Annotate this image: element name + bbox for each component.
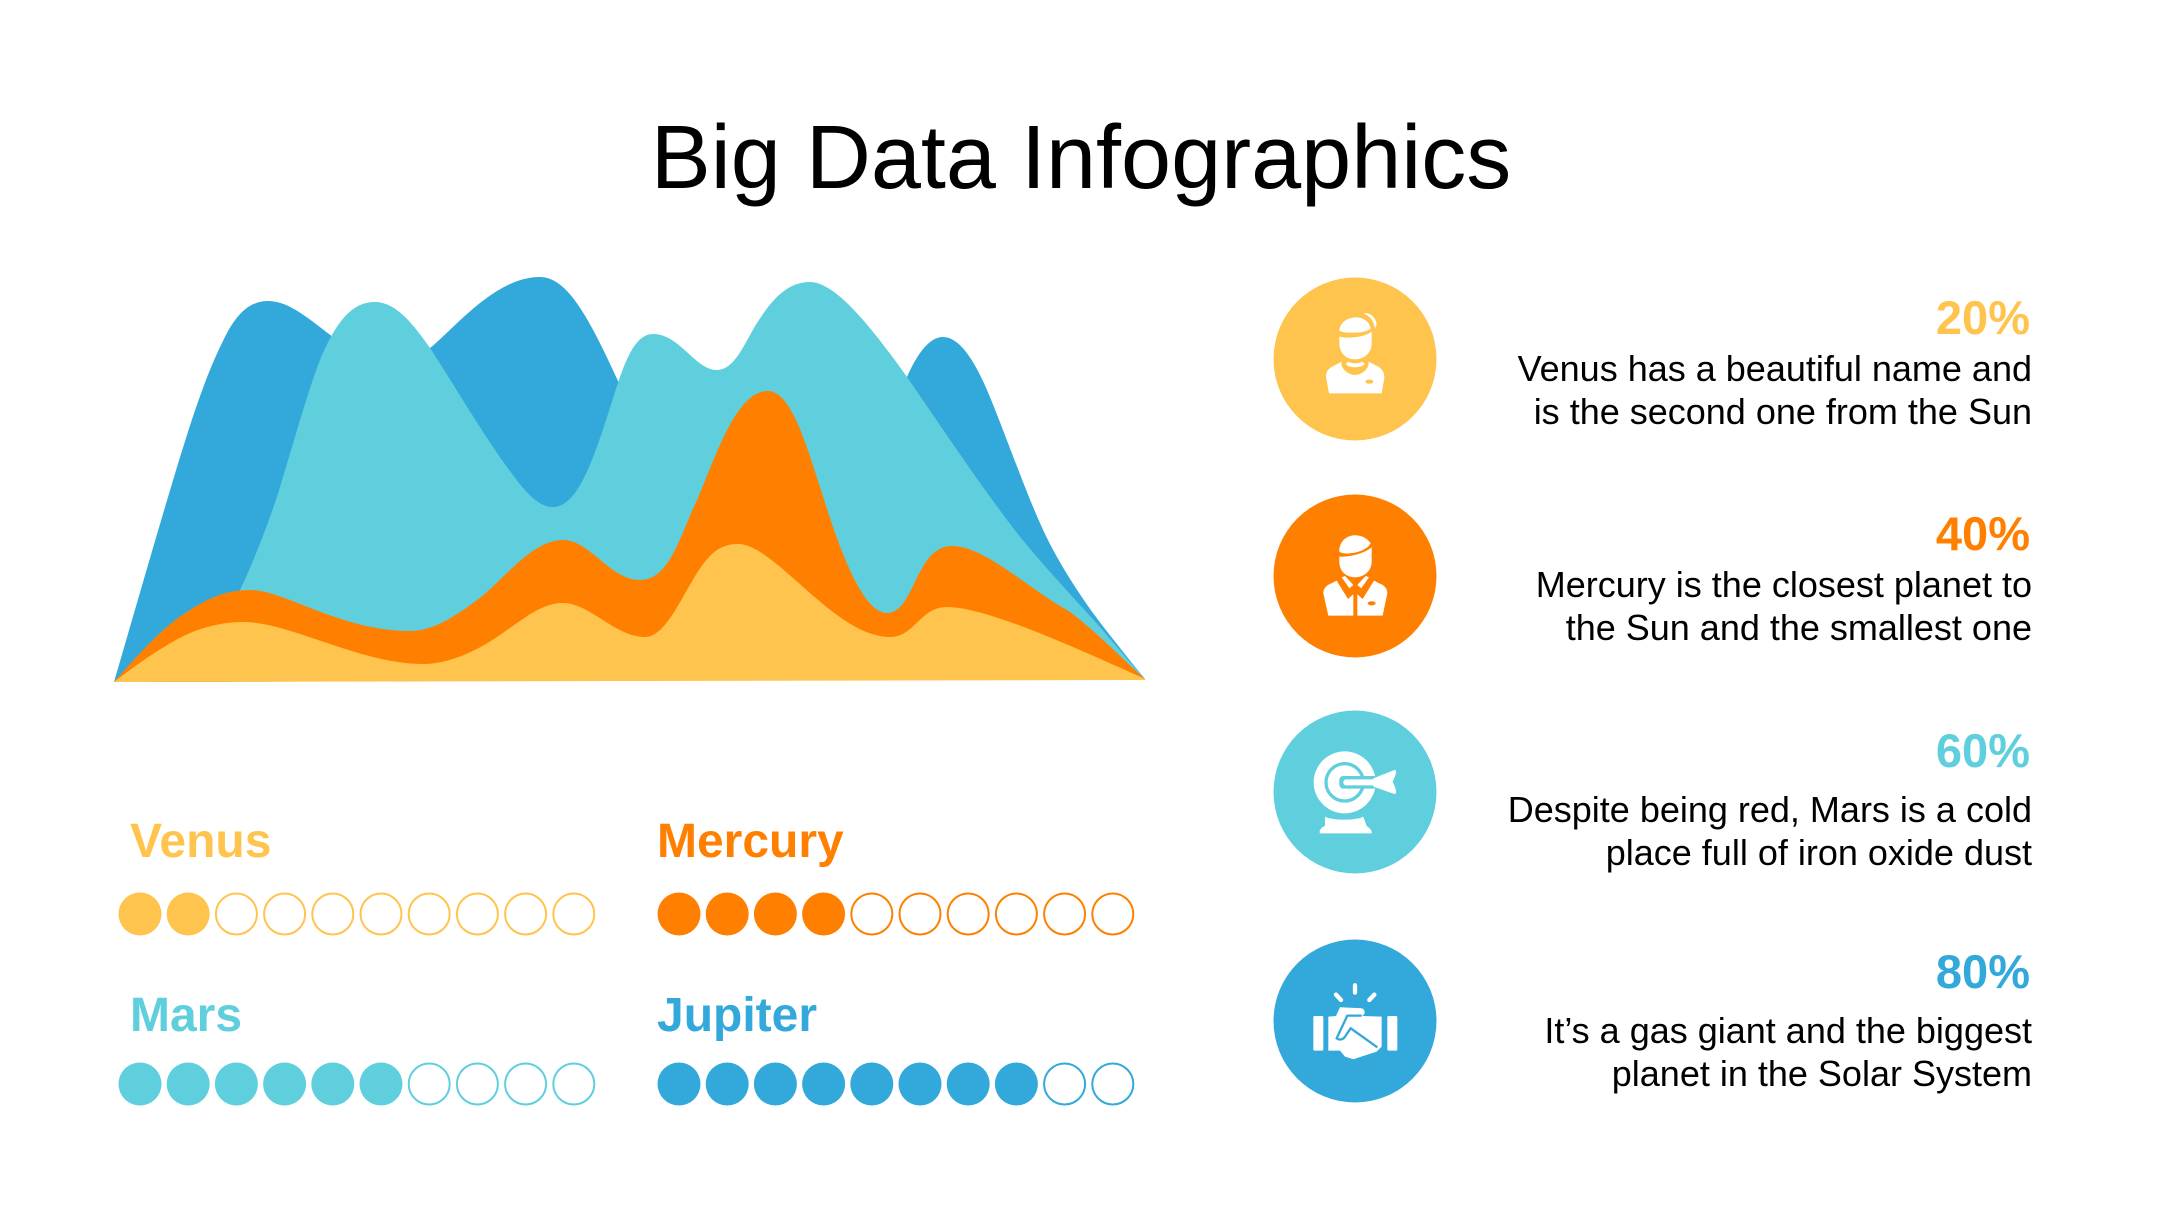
legend: Mars: Mars — [130, 989, 242, 1042]
legend: Jupiter — [657, 989, 1133, 1106]
stat: Jupiter 80%: 80% — [1936, 945, 2030, 998]
legend: Jupiter: Jupiter — [657, 989, 817, 1042]
stat: Venus 20%: 20% — [1936, 291, 2030, 344]
stat: Mars 60% — [1508, 724, 2032, 873]
legend: Mercury — [657, 815, 1133, 936]
legend: Mars — [118, 989, 594, 1106]
stat: Mars 60%: 60% — [1936, 724, 2030, 777]
stat: Mercury 40%: Mercury is the closest planet to — [1536, 564, 2032, 605]
stat: Venus 20% — [1518, 291, 2032, 432]
stat: Jupiter 80%: planet in the Solar System — [1612, 1053, 2032, 1094]
stat: Mercury 40%: 40% — [1936, 507, 2030, 560]
icon: target in teal circle — [1274, 710, 1436, 874]
stat: Venus 20%: Venus has a beautiful name and — [1518, 348, 2032, 389]
stat: Venus 20%: is the second one from the Sun — [1534, 391, 2032, 432]
area: Mars — [240, 282, 1145, 680]
icon: handshake in blue circle — [1274, 940, 1436, 1102]
legend: Mercury: Mercury — [657, 815, 844, 868]
stat: Jupiter 80% — [1544, 945, 2032, 1094]
stat: Mars 60%: Despite being red, Mars is a cold — [1508, 789, 2032, 830]
stat: Jupiter 80%: It’s a gas giant and the biggest — [1544, 1010, 2032, 1051]
legend: Venus: Venus — [130, 815, 271, 868]
area: Jupiter — [114, 277, 1145, 682]
icon: man in orange circle — [1274, 494, 1436, 658]
stat: Mercury 40%: the Sun and the smallest one — [1566, 607, 2032, 648]
legend: Venus — [118, 815, 594, 936]
title: Big Data Infographics — [651, 108, 1511, 208]
stat: Mercury 40% — [1536, 507, 2032, 648]
area: Venus — [114, 544, 1145, 682]
area chart — [114, 277, 1145, 682]
icon: woman in yellow circle — [1274, 278, 1436, 440]
area: Mercury — [114, 391, 1145, 682]
stat: Mars 60%: place full of iron oxide dust — [1606, 832, 2032, 873]
